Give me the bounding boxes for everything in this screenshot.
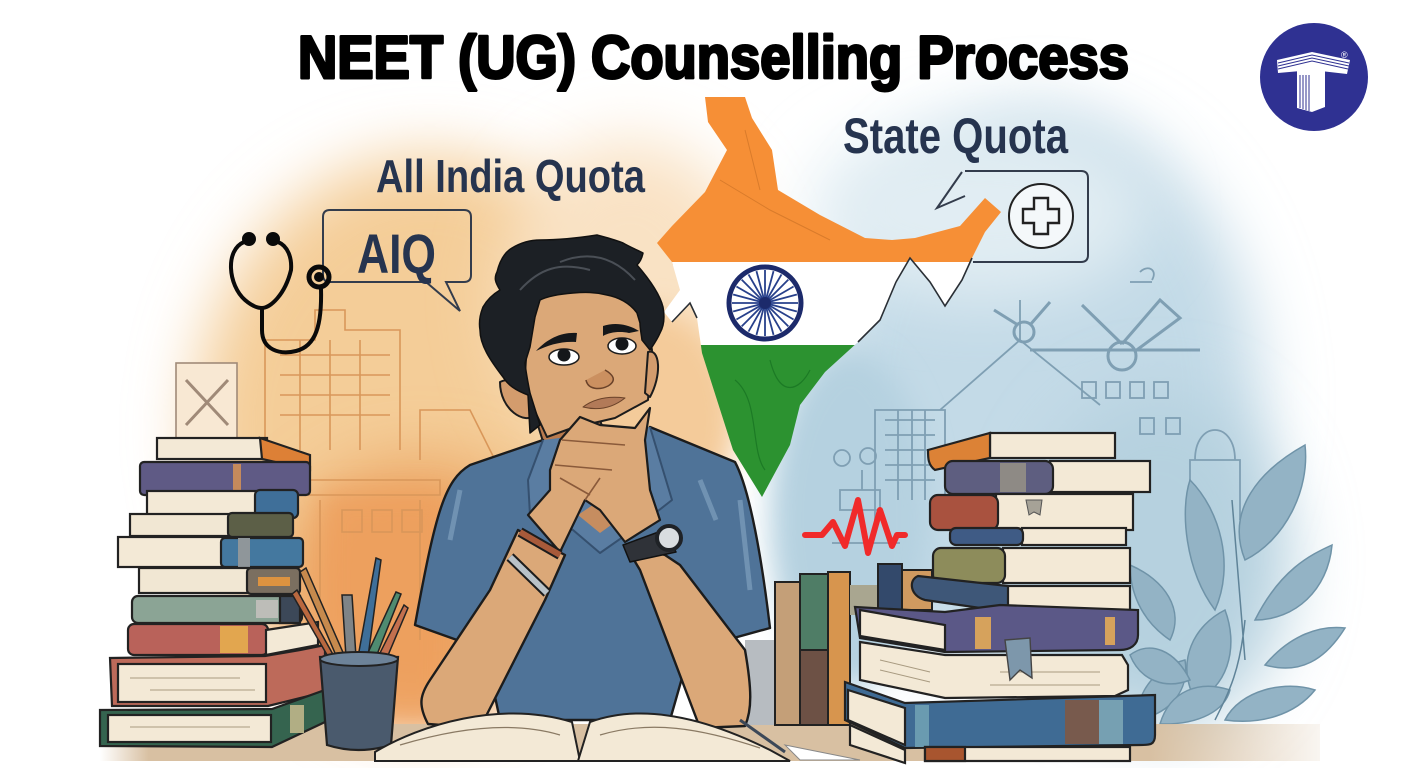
open book on desk <box>375 714 860 761</box>
left stack of books <box>100 438 325 747</box>
wristwatch <box>623 530 676 562</box>
eyes <box>549 349 579 365</box>
callout: State Quota speech bubble with medical cross <box>937 171 1088 262</box>
right forearm <box>625 545 750 728</box>
logo: ® <box>1341 50 1348 60</box>
hair <box>479 235 664 433</box>
heading: All India Quota: All India Quota <box>376 150 645 202</box>
student <box>415 235 770 728</box>
nose and mouth <box>586 370 613 388</box>
bracelets <box>520 532 560 555</box>
blue shirt <box>415 427 770 720</box>
logo <box>1260 23 1368 131</box>
callout: AIQ speech bubble <box>323 210 471 311</box>
callout: AIQ speech bubble: AIQ <box>357 222 436 285</box>
neck <box>530 400 620 480</box>
left forearm <box>421 530 565 728</box>
desk surface <box>100 724 1320 761</box>
icon: stethoscope <box>231 234 329 352</box>
face <box>525 285 652 437</box>
heading: State Quota: State Quota <box>843 108 1069 164</box>
right stack of books <box>845 433 1155 763</box>
pencil cup with pencils <box>292 558 408 750</box>
India map in tricolour <box>657 97 1001 497</box>
background: orange watercolor wash <box>195 140 760 725</box>
icon: red ECG pulse <box>805 500 905 553</box>
background: blue city and equipment line art <box>832 268 1240 543</box>
background: blue watercolor wash <box>770 110 1290 730</box>
eyebrows <box>536 324 639 351</box>
plant leaves <box>1130 445 1345 724</box>
upright books behind the student <box>745 564 932 725</box>
ears <box>500 380 535 418</box>
background: orange hospital line art <box>176 310 500 640</box>
icon: ashoka chakra <box>729 267 801 339</box>
hands <box>528 408 660 552</box>
title: NEET (UG) Counselling Process <box>298 24 1129 91</box>
